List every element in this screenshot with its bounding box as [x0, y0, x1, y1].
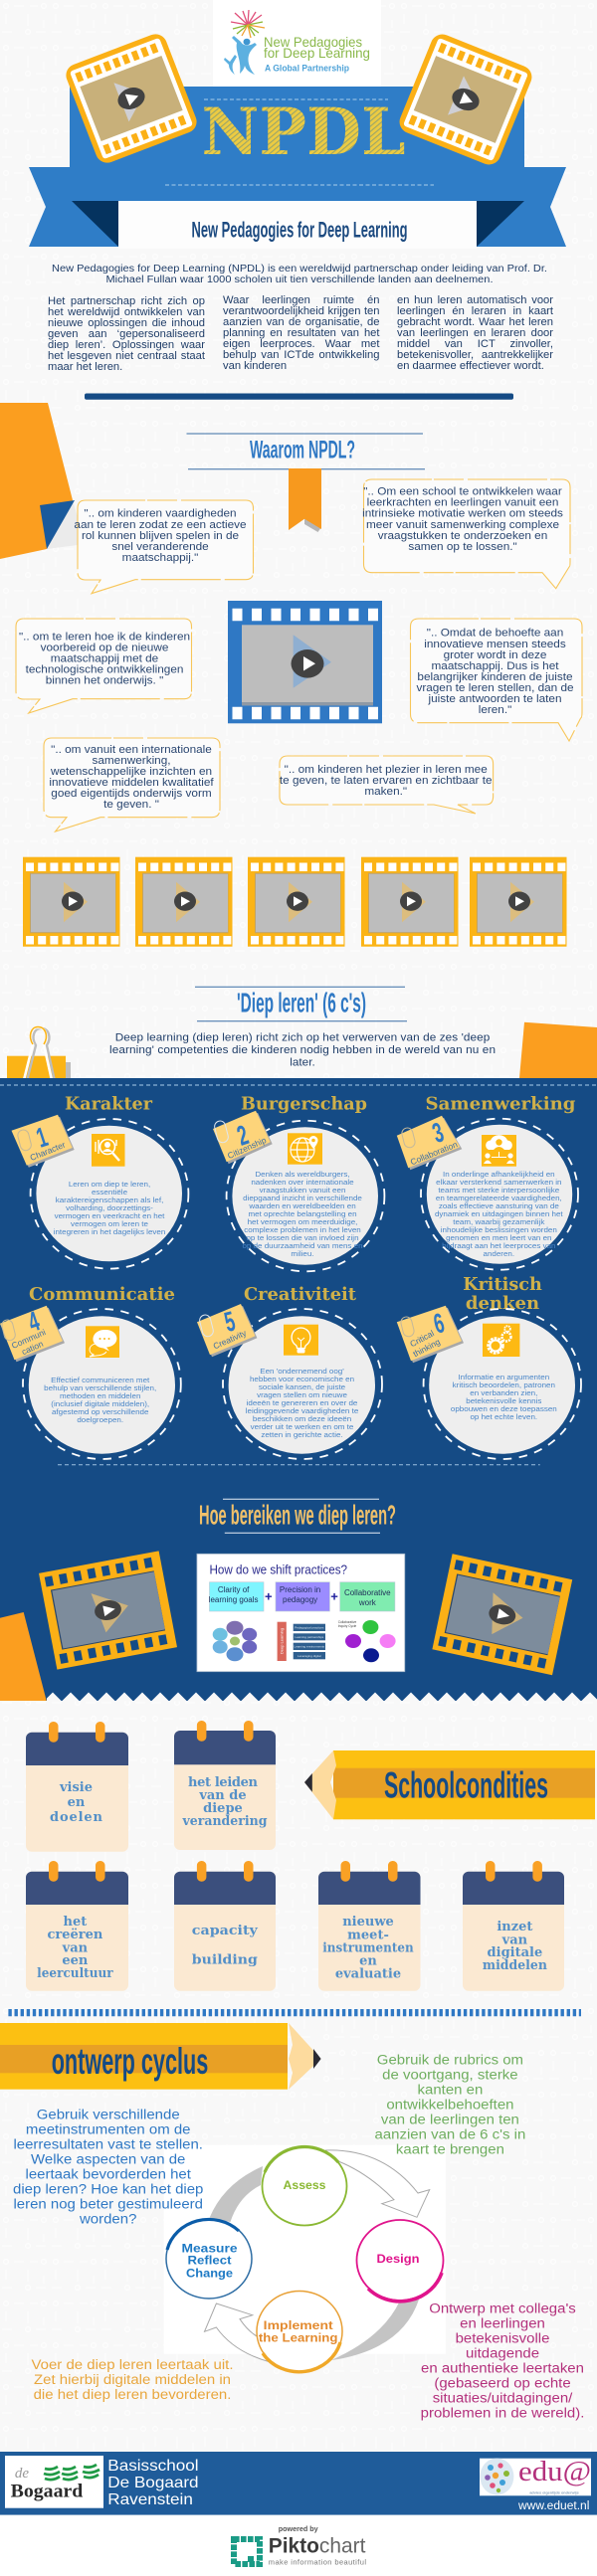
- card 5: Creativiteit: [197, 1284, 382, 1459]
- card 5: Creativiteit: Creativiteit: [244, 1284, 357, 1305]
- card 5: Creativiteit: zetten in gerichte actie.: [261, 1430, 343, 1439]
- speech bubble 1: rol kunnen blijven spelen in de: [82, 530, 239, 542]
- card 3: Samenwerking: In onderlinge afhankelijkheid en: [443, 1170, 555, 1179]
- icon: film frame left: [63, 31, 200, 166]
- text column 2: van kinderen: [223, 360, 287, 372]
- blue text: meetinstrumenten: leertaak bevorderden het: [26, 2167, 191, 2182]
- card 5: Creativiteit: verder uit te werken en om te: [251, 1422, 353, 1431]
- film frame 5: [470, 857, 567, 947]
- slide: How do we shift practices?: Deep Learning: [279, 1628, 285, 1654]
- card 4: Communicatie: Communicatie: [29, 1284, 175, 1305]
- card 4: Communicatie: behulp van verschillende stijlen,: [44, 1383, 156, 1392]
- text column 3: middel van ICT zinvoller,: [397, 338, 553, 350]
- slide: How do we shift practices?: pedagogy: [283, 1595, 317, 1604]
- speech bubble 1: maatschappij.": [122, 552, 198, 564]
- blue text: meetinstrumenten: meetinstrumenten om de: [26, 2122, 190, 2137]
- calendar card: visie en doelen: en: [68, 1795, 86, 1810]
- speech bubble 3: technologische ontwikkelingen: [26, 664, 183, 675]
- calendar card: visie en doelen: doelen: [50, 1810, 103, 1825]
- logo: New Pedagogies for Deep Learning: New Pedagogies: [264, 35, 362, 50]
- navy section: six competences: [0, 1078, 597, 1701]
- node: Assess: Assess: [283, 2178, 326, 2192]
- card 1: Karakter: Karakter: [65, 1094, 152, 1114]
- logo: New Pedagogies for Deep Learning: A Global Partnership: [265, 64, 349, 74]
- slide: How do we shift practices?: Leveraging digital: [298, 1654, 321, 1658]
- calendar card: inzet van digitale middelen: [463, 1861, 564, 1991]
- blue text: meetinstrumenten: leren nog beter gestimuleerd: [13, 2197, 203, 2212]
- node: Measure Reflect Change: Change: [186, 2266, 233, 2280]
- note: 4 Communication: Communi: [10, 1327, 47, 1351]
- blue text: meetinstrumenten: worden?: [79, 2212, 136, 2227]
- card 5: Creativiteit: vragen stellen om nieuwe: [257, 1390, 347, 1399]
- speech bubble 3: maatschappij met de: [51, 653, 158, 664]
- card 6: Kritisch denken: kritisch beoordelen, patronen: [453, 1380, 555, 1389]
- card 2: Burgerschap: op te lossen die van invloed zijn: [246, 1233, 359, 1242]
- deep learning intro text: Deep learning (diep leren) richt zich op het verwerven van de zes 'deep: [115, 1032, 490, 1043]
- text column 3: [397, 295, 553, 375]
- heading: Hoe bereiken we diep leren?: Hoe bereiken we diep leren?: [199, 1500, 396, 1531]
- card 3: Samenwerking: bijdraagt aan het leerproces van: [442, 1241, 556, 1250]
- card 2: Burgerschap: het vermogen om meerduidige,: [248, 1217, 357, 1226]
- text column 2: behulp van ICTde ontwikkeling: [223, 349, 380, 361]
- text column 3: betekenisvoller, aantrekkelijker: [397, 349, 553, 361]
- school name: Ravenstein: [107, 2490, 193, 2508]
- icon: Piktochart mark: [234, 2539, 260, 2564]
- calendar card: inzet van digitale middelen: middelen: [483, 1958, 547, 1973]
- deep learning intro text: later.: [290, 1057, 315, 1068]
- intro text: New Pedagogies for Deep Learning (NPDL) is een wereldwijd partnerschap onder leiding van Prof. Dr.: [52, 263, 547, 275]
- green text: rubrics: de voortgang, sterke: [382, 2068, 518, 2083]
- school name: De Bogaard: [107, 2474, 199, 2491]
- magenta text: ontwerp: problemen in de wereld).: [421, 2406, 584, 2421]
- magenta text: ontwerp: [421, 2301, 584, 2421]
- card 3: Samenwerking: anderen.: [483, 1249, 514, 1258]
- slide: How do we shift practices?: [197, 1554, 405, 1672]
- speech bubble 6: maken.": [364, 786, 407, 798]
- card 1: Karakter: karaktereigenschappen als lef,: [56, 1196, 163, 1204]
- text column 3: leerlingen én leraren in kaart: [397, 305, 553, 317]
- note: 1 Character: 1: [33, 1121, 52, 1154]
- card 1: Karakter: vermogen en veerkracht en het: [55, 1211, 165, 1220]
- magenta text: ontwerp: uitdagende: [466, 2346, 539, 2361]
- film frame 4: [361, 857, 458, 947]
- text column 2: aanzien van de organisatie, de: [223, 316, 380, 328]
- speech bubble 3: binnen het onderwijs. ": [46, 675, 163, 686]
- calendar card: het creëren van een leercultuur: het: [64, 1915, 87, 1930]
- icon: bookmark: [289, 468, 321, 532]
- speech bubble 5: samenwerking,: [92, 755, 171, 767]
- card 1: Karakter: Leren om diep te leren,: [69, 1180, 150, 1189]
- speech bubble 2: intrinsieke motivatie werken om steeds: [362, 508, 563, 519]
- cycle diagram: [164, 2145, 446, 2372]
- text column 1: nieuwe oplossingen die inhoud: [48, 317, 205, 329]
- speech bubble 4: vragen te leren stellen, dan de: [416, 682, 574, 694]
- card 6: Kritisch denken: opbouwen en deze toepassen: [451, 1404, 557, 1413]
- note: 2 Citizenship: [213, 1111, 273, 1164]
- green text: rubrics: aanzien van de 6 c's in: [375, 2127, 525, 2142]
- blue text: meetinstrumenten: diep leren? Hoe kan het diep: [13, 2182, 203, 2197]
- card 2: Burgerschap: [213, 1094, 384, 1271]
- blue text: meetinstrumenten: leerresultaten vast te stellen.: [13, 2137, 203, 2152]
- card 6: Kritisch denken: [397, 1274, 581, 1459]
- card 3: Samenwerking: teams met sterke interpersoonlijke: [438, 1186, 559, 1195]
- note: 6 Critical thinking: 6: [431, 1307, 448, 1340]
- green text: rubrics: [375, 2053, 525, 2157]
- calendar card: visie en doelen: [26, 1722, 128, 1852]
- note: 6 Critical thinking: [397, 1306, 464, 1363]
- note: 5 Creativity: 5: [221, 1305, 238, 1338]
- card 4: Communicatie: [0, 1284, 181, 1459]
- logo: edu@: advies eigentijds onderwijs: [529, 2490, 579, 2494]
- note: 5 Creativity: [197, 1304, 257, 1357]
- calendar card: nieuwe meetinstrumenten en evaluatie: en: [359, 1953, 377, 1969]
- orange text: leertaak: Zet hierbij digitale middelen in: [34, 2373, 231, 2388]
- slide: How do we shift practices?: Collaborative: [344, 1588, 391, 1597]
- powered by Piktochart: [234, 2524, 366, 2566]
- ribbon: [29, 87, 566, 249]
- speech bubble 4: maatschappij. Dus is het: [431, 660, 559, 672]
- logo: de Bogaard: de: [15, 2466, 29, 2482]
- calendar card: het leiden van de diepe verandering: van de: [198, 1788, 247, 1803]
- header banner: [29, 0, 566, 249]
- intro text: Michael Fullan waar 1000 scholen uit tien verschillende landen aan deelnemen.: [105, 274, 494, 285]
- note: 4 Communication: [0, 1305, 65, 1362]
- node: Measure Reflect Change: [166, 2219, 252, 2299]
- card 6: Kritisch denken: en verbanden zien,: [470, 1388, 537, 1397]
- card 4: Communicatie: Effectief communiceren met: [51, 1376, 150, 1384]
- speech bubble 2: [362, 479, 570, 589]
- card 1: Karakter: vermogen om leren te: [71, 1219, 148, 1228]
- calendar card: het creëren van een leercultuur: [26, 1861, 128, 1991]
- card 6: Kritisch denken: Informatie en argumenten: [458, 1373, 549, 1381]
- note: 1 Character: [12, 1115, 75, 1168]
- text column 2: planning en resultaten van het: [223, 327, 380, 339]
- speech bubble 1: aan te leren zodat ze een actieve: [74, 519, 247, 531]
- heading: Diep leren: 'Diep leren' (6 c's): [237, 988, 366, 1018]
- speech bubble 6: te geven, te laten ervaren en zichtbaar te: [280, 775, 493, 787]
- text column 1: het lesgeven niet centraal staat: [48, 350, 205, 362]
- slide: How do we shift practices?: Learning environments: [295, 1645, 325, 1649]
- pencil: ontwerp cyclus: [0, 2023, 321, 2090]
- card 5: Creativiteit: beschikken om deze ideeën: [253, 1414, 351, 1423]
- node: Implement the Learning: Implement: [264, 2318, 333, 2332]
- orange text: leertaak: die het diep leren bevorderen.: [34, 2388, 231, 2403]
- card 3: Samenwerking: en teamgerelateerde vaardigheden,: [436, 1194, 562, 1202]
- magenta text: ontwerp: Ontwerp met collega's: [429, 2301, 576, 2316]
- deep learning intro text: [109, 1032, 496, 1068]
- decorative orange corner lower: [0, 1612, 47, 1701]
- calendar card: nieuwe meetinstrumenten en evaluatie: nieuwe: [342, 1915, 394, 1930]
- blue text: meetinstrumenten: Welke aspecten van de: [31, 2152, 185, 2167]
- icon: blue film frame: [228, 601, 382, 723]
- decorative orange corner: [0, 403, 86, 559]
- speech bubble 5: [44, 738, 220, 831]
- speech bubble 2: samen op te lossen.": [408, 541, 517, 553]
- card 3: Samenwerking: genomen en men leert van en: [446, 1233, 552, 1242]
- arrow: implement to measure: [205, 2303, 271, 2362]
- speech bubble 3: voorbereid op de nieuwe: [41, 643, 168, 653]
- note: 3 Collaboration: [397, 1116, 462, 1170]
- node: Design: [356, 2220, 444, 2301]
- magenta text: ontwerp: (gebaseerd op echte: [434, 2376, 571, 2391]
- card 1: Karakter: [12, 1094, 188, 1269]
- card 6: Kritisch denken: Kritisch: [463, 1274, 542, 1295]
- card 6: Kritisch denken: denken: [466, 1293, 539, 1314]
- card 3: Samenwerking: dynamiek en uitdagingen binnen het: [435, 1209, 564, 1218]
- pencil: ontwerp cyclus: ontwerp cyclus: [52, 2041, 208, 2082]
- slide: How do we shift practices?: Clarity of: [218, 1585, 250, 1594]
- card 5: Creativiteit: hebben voor economische en: [250, 1375, 354, 1383]
- film frames row: [23, 857, 567, 947]
- note: 6 Critical thinking: Critical: [408, 1328, 436, 1349]
- calendar card: capacity building: [174, 1861, 276, 1991]
- calendar card: het leiden van de diepe verandering: [174, 1721, 276, 1850]
- logo: New Pedagogies for Deep Learning: [213, 0, 381, 90]
- film frame 2: [135, 857, 233, 947]
- blue text: meetinstrumenten: Gebruik verschillende: [37, 2108, 180, 2122]
- logo: edu@: [480, 2457, 591, 2495]
- card 5: Creativiteit: Een 'ondernemend oog': [260, 1367, 344, 1376]
- decorative orange block right: [519, 1022, 597, 1078]
- speech bubble 5: wetenschappelijke inzichten en: [50, 766, 212, 778]
- text column 3: en daarmee effectiever wordt.: [397, 360, 544, 372]
- powered by Piktochart: Piktochart: [269, 2534, 366, 2558]
- speech bubble 2: vraagstukken te onderzoeken en: [378, 530, 547, 542]
- card 4: Communicatie: (inclusief digitale middelen),: [51, 1399, 149, 1408]
- calendar card: nieuwe meetinstrumenten en evaluatie: [318, 1861, 420, 1991]
- intro text: [52, 263, 547, 285]
- logo: de Bogaard: [5, 2456, 103, 2508]
- speech bubble 5: ".. om vanuit een internationale: [51, 744, 212, 756]
- calendar card: het creëren van een leercultuur: een: [62, 1953, 89, 1968]
- logo: New Pedagogies for Deep Learning: for Deep Learning: [264, 46, 370, 61]
- calendar card: het leiden van de diepe verandering: verandering: [182, 1814, 267, 1829]
- card 6: Kritisch denken: betekenisvolle kennis: [466, 1396, 541, 1405]
- speech bubble 4: juiste antwoorden te laten: [427, 693, 561, 705]
- calendar card: capacity building: capacity: [192, 1924, 258, 1938]
- calendar card: inzet van digitale middelen: van: [501, 1933, 528, 1947]
- speech bubble 4: belangrijker kinderen de juiste: [417, 671, 573, 683]
- node: Implement the Learning: [257, 2292, 342, 2372]
- icon: speech bubbles: [86, 1326, 119, 1358]
- text column 1: maar het leren.: [48, 361, 122, 373]
- speech bubble 5: te geven. ": [103, 799, 159, 811]
- speech bubble 3: ".. om te leren hoe ik de kinderen: [19, 632, 190, 643]
- note: 3 Collaboration: Collaboration: [409, 1139, 459, 1167]
- deep learning intro text: learning' competenties die kinderen nodig hebben in de wereld van nu en: [109, 1044, 496, 1056]
- green text: rubrics: kanten en: [418, 2083, 483, 2098]
- card 2: Burgerschap: complexe problemen in het leven: [244, 1225, 361, 1234]
- slide: How do we shift practices?: How do we shift practices?: [209, 1562, 347, 1577]
- calendar card: nieuwe meetinstrumenten en evaluatie: evaluatie: [335, 1967, 401, 1981]
- card 3: Samenwerking: team, waarbij gezamenlijk: [453, 1217, 544, 1226]
- magenta text: ontwerp: situaties/uitdagingen/: [433, 2391, 573, 2406]
- card 1: Karakter: volharding, doorzettings-: [66, 1203, 153, 1212]
- NPDL lettering: NPDL: [201, 94, 406, 170]
- arrow: design to implement: [331, 2300, 419, 2360]
- text column 2: [223, 295, 380, 375]
- card 2: Burgerschap: waarden en wereldbeelden en: [248, 1201, 356, 1210]
- node: Measure Reflect Change: Measure: [181, 2241, 238, 2255]
- card 2: Burgerschap: milieu.: [291, 1249, 314, 1258]
- icon: tilted film frame right: [432, 1554, 572, 1675]
- school name: Basisschool: [107, 2457, 199, 2475]
- powered by Piktochart: make information beautiful: [269, 2558, 366, 2566]
- speech bubble 5: goed eigentijds onderwijs vorm: [51, 788, 212, 800]
- calendar card: nieuwe meetinstrumenten en evaluatie: meet-: [347, 1928, 389, 1943]
- green text: rubrics: kaart te brengen: [396, 2142, 504, 2157]
- orange text: leertaak: [31, 2358, 234, 2403]
- calendar card: het leiden van de diepe verandering: het leiden: [188, 1775, 259, 1790]
- speech bubble 4: leren.": [479, 704, 511, 716]
- speech bubble 1: ".. om kinderen vaardigheden: [84, 508, 237, 519]
- card 2: Burgerschap: Denken als wereldburgers,: [255, 1170, 350, 1179]
- slide: How do we shift practices?: +: [265, 1589, 273, 1603]
- icon: gears: [483, 1324, 519, 1357]
- card 3: Samenwerking: inhoudelijke beslissingen worden: [441, 1225, 557, 1234]
- note: 1 Character: Character: [29, 1140, 67, 1163]
- card 2: Burgerschap: met oprechte belangstelling en: [248, 1209, 357, 1218]
- note: 3 Collaboration: 3: [429, 1116, 448, 1149]
- calendar card: het leiden van de diepe verandering: diepe: [203, 1801, 243, 1816]
- icon: collaboration people: [482, 1135, 516, 1167]
- zigzag edge: [47, 1693, 597, 1701]
- logo: de Bogaard: Bogaard: [11, 2481, 84, 2502]
- card 2: Burgerschap: vraagstukken vanuit een: [260, 1186, 345, 1195]
- calendar card: het creëren van een leercultuur: van: [62, 1941, 89, 1955]
- text column 2: verantwoordelijkheid krijgen ten: [223, 305, 380, 317]
- text column 1: het wereldwijd ontwikkelen van: [48, 306, 205, 318]
- slide: How do we shift practices?: Learning partnerships: [295, 1635, 324, 1639]
- speech bubble 3: [16, 619, 191, 713]
- calendar card: het creëren van een leercultuur: leercultuur: [37, 1966, 113, 1981]
- card 2: Burgerschap: Burgerschap: [241, 1094, 367, 1114]
- note: 4 Communication: 4: [24, 1305, 43, 1338]
- green text: rubrics: Gebruik de rubrics om: [377, 2053, 523, 2068]
- card 4: Communicatie: afgestemd op verschillende: [52, 1407, 148, 1416]
- icon: globe with pin: [288, 1133, 322, 1165]
- magenta text: ontwerp: en authentieke leertaken: [421, 2361, 584, 2376]
- text column 3: van leerlingen en leraren door: [397, 327, 553, 339]
- slide: How do we shift practices?: +: [330, 1589, 338, 1603]
- speech bubble 1: snel veranderende: [111, 541, 209, 553]
- speech bubble 5: innovatieve middelen kwalitatief: [49, 777, 215, 789]
- speech bubble 4: ".. Omdat de behoefte aan: [427, 628, 563, 639]
- calendar card: nieuwe meetinstrumenten en evaluatie: instrumenten: [322, 1941, 414, 1955]
- arrow: measure to assess: [209, 2166, 263, 2222]
- slide: How do we shift practices?: Pedagogical practices: [295, 1625, 324, 1629]
- title: New Pedagogies for Deep Learning: [191, 217, 408, 243]
- speech bubble 2: leerkrachten en leerlingen vanuit een: [367, 497, 558, 508]
- node: Design: Design: [376, 2252, 420, 2266]
- text column 2: eigen leerproces. Waar met: [223, 338, 380, 350]
- calendar card: capacity building: building: [192, 1953, 258, 1967]
- speech bubble 4: groter wordt in deze: [444, 649, 546, 661]
- node: Measure Reflect Change: Reflect: [187, 2254, 232, 2268]
- speech bubble 6: [280, 756, 494, 814]
- divider bar: [85, 394, 513, 400]
- icon: film frame right: [396, 31, 535, 168]
- node: Implement the Learning: the Learning: [259, 2330, 338, 2344]
- card 3: Samenwerking: [397, 1094, 578, 1270]
- note: 5 Creativity: Creativity: [212, 1328, 249, 1351]
- card 1: Karakter: essentiële: [92, 1188, 127, 1196]
- arrow: assess to design: [325, 2150, 430, 2217]
- icon: tilted film frame left: [39, 1551, 177, 1670]
- slide: How do we shift practices?: work: [358, 1598, 377, 1607]
- card 5: Creativiteit: sociale kansen, de juiste: [259, 1382, 345, 1391]
- card 2: Burgerschap: diepgaand inzicht in verschillende: [243, 1194, 362, 1202]
- speech bubble 2: meer vanuit samenwerking complexe: [366, 519, 559, 531]
- calendar card: inzet van digitale middelen: digitale: [488, 1945, 542, 1960]
- film frame 3: [248, 857, 344, 947]
- magenta text: ontwerp: betekenisvolle: [456, 2331, 549, 2346]
- text column 1: [48, 296, 205, 376]
- speech bubble 1: [74, 500, 253, 594]
- text column 1: geven aan ‘gepersonaliseerd: [48, 328, 205, 340]
- note: 2 Citizenship: Citizenship: [226, 1135, 268, 1161]
- green text: rubrics: ontwikkelbehoeften: [386, 2098, 513, 2113]
- card 4: Communicatie: doelgroepen.: [77, 1415, 123, 1424]
- note: 2 Citizenship: 2: [234, 1119, 252, 1152]
- website: www.eduet.nl: [517, 2500, 589, 2512]
- card 3: Samenwerking: zoals effectieve aansturing van de: [439, 1201, 559, 1210]
- slide: How do we shift practices?: Precision in: [280, 1585, 320, 1594]
- orange text: leertaak: Voer de diep leren leertaak uit.: [31, 2358, 234, 2373]
- card 3: Samenwerking: Samenwerking: [426, 1094, 576, 1114]
- icon: light bulb: [284, 1325, 318, 1356]
- card 6: Kritisch denken: op het echte leven.: [470, 1412, 537, 1421]
- magenta text: ontwerp: en leerlingen: [460, 2316, 545, 2331]
- icon: magnifier person: [92, 1134, 125, 1167]
- heading: Waarom NPDL?: Waarom NPDL?: [250, 436, 355, 463]
- card 1: Karakter: integreren in het dagelijks leven: [54, 1227, 165, 1236]
- logo: edu@: edu@: [518, 2457, 591, 2487]
- blue text: meetinstrumenten: [13, 2108, 203, 2227]
- note: 4 Communication: cation: [20, 1339, 45, 1357]
- text column 3: gebracht wordt. Waar het leren: [397, 316, 553, 328]
- card 4: Communicatie: methoden en middelen: [60, 1391, 140, 1400]
- card 3: Samenwerking: elkaar versterkend samenwerken in: [436, 1178, 562, 1187]
- card 2: Burgerschap: op de duurzaamheid van mens en: [242, 1241, 363, 1250]
- icon: binder clip: [7, 1026, 71, 1081]
- speech bubble 6: ".. om kinderen het plezier in leren mee: [285, 764, 488, 776]
- slide: How do we shift practices?: learning goals: [209, 1595, 259, 1604]
- node: Assess: [263, 2146, 346, 2226]
- note: 6 Critical thinking: thinking: [411, 1337, 442, 1359]
- speech bubble 4: innovatieve mensen steeds: [424, 639, 566, 650]
- speech bubble 4: [410, 619, 582, 741]
- slide: How do we shift practices?: Collaborative: [338, 1620, 357, 1624]
- card 5: Creativiteit: ideeën te genereren en over de: [247, 1398, 357, 1407]
- card 2: Burgerschap: nadenken over internationale: [251, 1178, 354, 1187]
- slide: How do we shift practices?: Inquiry Cycle: [338, 1624, 356, 1628]
- calendar card: het creëren van een leercultuur: creëren: [47, 1928, 103, 1942]
- school name: [107, 2457, 199, 2508]
- powered by Piktochart: powered by: [279, 2524, 318, 2533]
- calendar card: inzet van digitale middelen: inzet: [497, 1920, 532, 1934]
- green text: rubrics: van de leerlingen ten: [381, 2113, 519, 2127]
- card 5: Creativiteit: leidinggevende vaardigheden te: [246, 1406, 358, 1415]
- text column 1: diep leren’. Oplossingen waar: [48, 339, 205, 351]
- footer band: [0, 2452, 597, 2576]
- film frame 1: [23, 857, 119, 947]
- calendar card: visie en doelen: visie: [59, 1780, 93, 1795]
- pencil: Schoolcondities: [304, 1750, 595, 1819]
- speech bubble 2: ".. Om een school te ontwikkelen waar: [363, 486, 562, 497]
